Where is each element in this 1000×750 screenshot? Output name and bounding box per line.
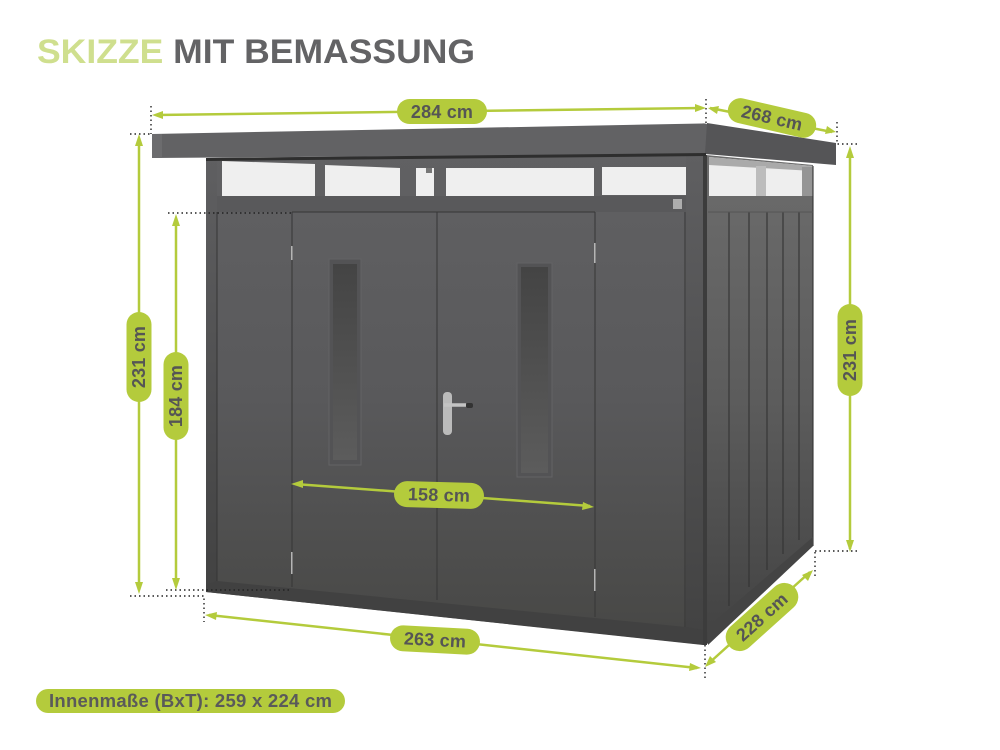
- right door window: [517, 263, 552, 477]
- dimension: 158 cm: [291, 480, 594, 510]
- double door: [217, 212, 685, 627]
- hinge plate: [673, 199, 682, 209]
- upper windows: [222, 161, 688, 196]
- side base trim: [708, 537, 813, 645]
- roof shadow: [206, 153, 706, 161]
- dimension: 263 cm: 263 cm: [403, 628, 467, 652]
- dimension: 158 cm: 158 cm: [408, 484, 470, 506]
- door handle: [443, 392, 473, 435]
- left door window: [329, 259, 361, 465]
- dimension: 231 cm left: [126, 134, 152, 594]
- dimension: 228 cm: 228 cm: [732, 589, 792, 645]
- base trim: [206, 581, 703, 645]
- corner post: [686, 155, 707, 645]
- dimension: 184 cm: 184 cm: [166, 365, 186, 427]
- dimension: 231 cm right: [838, 146, 862, 552]
- shed side wall: [706, 155, 813, 645]
- title: SKIZZE MIT BEMASSUNG: [37, 33, 475, 71]
- roof front: [152, 123, 709, 158]
- shed illustration: [152, 123, 836, 645]
- dimension: 268 cm: 268 cm: [739, 101, 805, 135]
- transom band: [215, 196, 686, 212]
- door hinges: [291, 243, 596, 591]
- dimension: 231 cm right: 231 cm: [840, 319, 860, 381]
- dimension: 263 cm: [205, 612, 701, 671]
- dimension: 184 cm: [164, 214, 188, 590]
- side wall panel grooves: [708, 166, 813, 606]
- left post: [206, 159, 217, 592]
- dimension: 228 cm: [705, 570, 813, 667]
- shed front wall: [206, 153, 706, 645]
- dotted reference lines: [130, 99, 860, 678]
- dimension: 231 cm left: 231 cm: [129, 326, 149, 388]
- inner dimensions pill: Innenmaße (BxT): 259 x 224 cm: [49, 690, 332, 711]
- roof left cap: [152, 134, 162, 158]
- roof side: [705, 123, 836, 165]
- shed side window: [709, 157, 813, 196]
- dimension: 284 cm: [152, 99, 706, 124]
- dimension: 284 cm: 284 cm: [411, 102, 473, 122]
- dimension: 268 cm: [708, 96, 836, 140]
